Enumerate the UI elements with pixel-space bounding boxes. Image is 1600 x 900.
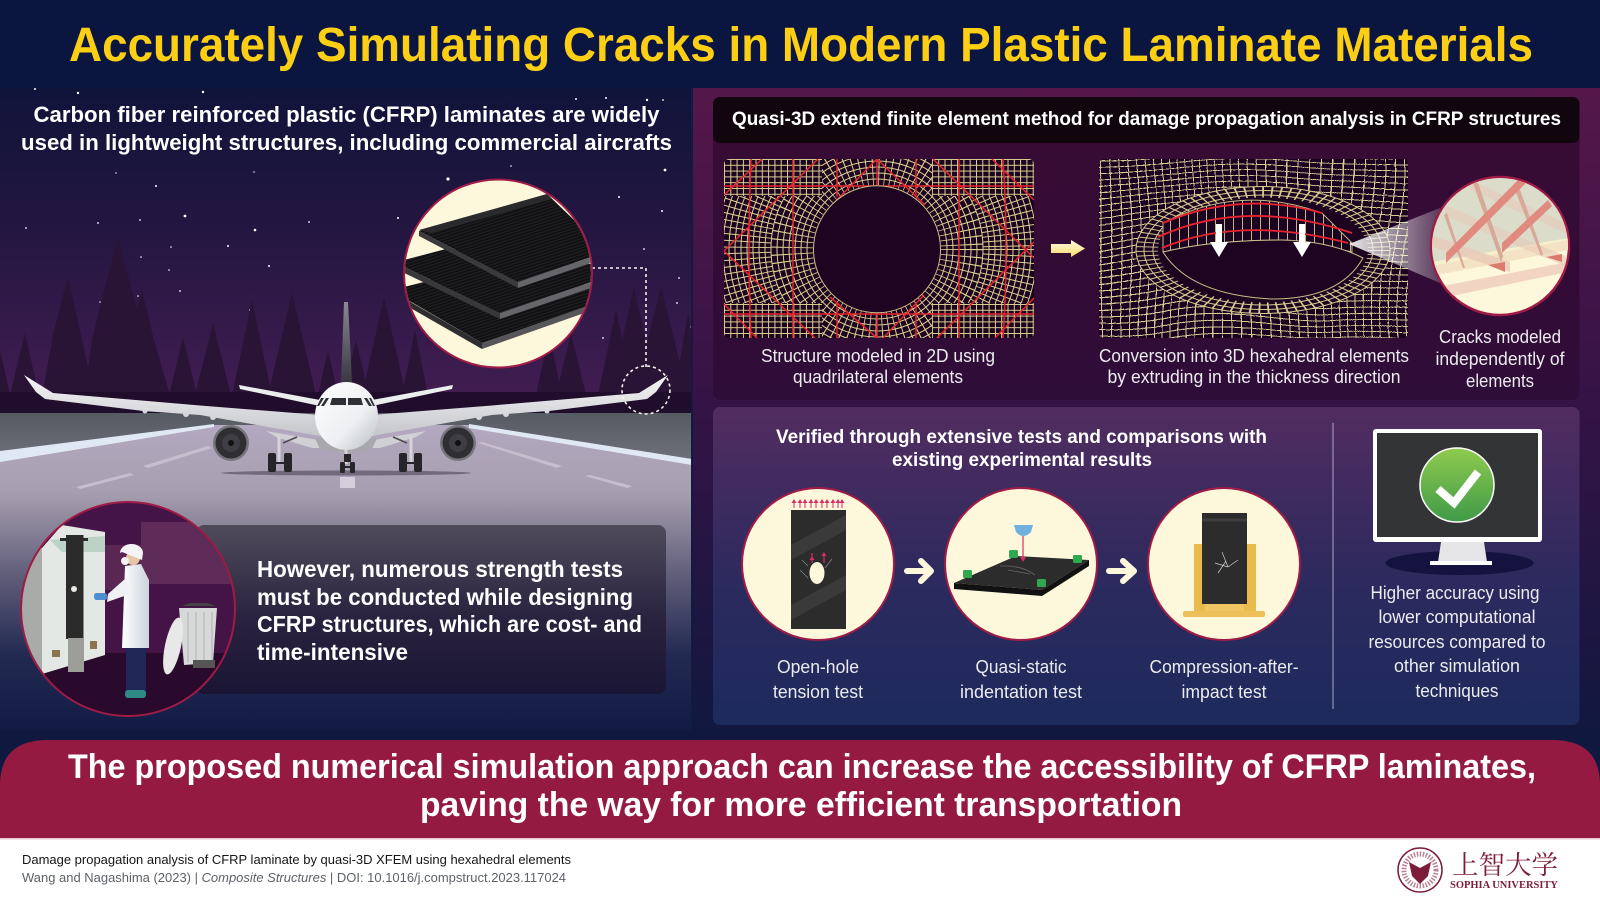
heading: verification: Verified through extensive tests and comparisons with (776, 426, 1267, 448)
citation: Damage propagation analysis of CFRP laminate by quasi-3D XFEM using hexahedral elements (22, 852, 571, 867)
cockpit windows (317, 398, 375, 406)
caption: cracks (1436, 327, 1565, 391)
test machine (22, 548, 42, 671)
icon: open-hole tension test (742, 488, 894, 640)
engine left (213, 425, 249, 461)
top layer (419, 194, 590, 262)
waste bin (159, 603, 217, 676)
label: open-hole: tension test (773, 682, 863, 702)
dashed wingtip callout connector (592, 268, 670, 414)
logo: Sophia University (1398, 845, 1558, 892)
label: quasi-static (960, 657, 1082, 702)
callout: testing cost text panel (196, 525, 666, 694)
callout: testing cost text panel: must be conducted while designing (257, 584, 633, 610)
landing gear (268, 434, 422, 473)
runway shoulders (0, 413, 692, 473)
fuselage (315, 382, 378, 450)
callout: testing cost text panel: However, numerous strength tests (257, 556, 623, 582)
caption: 2D: quadrilateral elements (793, 367, 963, 387)
runway dashes (76, 442, 632, 489)
tail fin (341, 302, 352, 382)
wing fairing (266, 431, 330, 448)
aircraft (24, 302, 668, 476)
runway edge lines (0, 424, 214, 462)
icon: monitor with check mark (1373, 429, 1542, 575)
bottom layer (406, 280, 590, 343)
label: quasi-static: indentation test (960, 682, 1082, 702)
icon: quasi-static indentation test (945, 488, 1097, 640)
icon: carbon laminate magnified circle (400, 180, 600, 368)
label: compression-after-impact: Compression-after- (1150, 657, 1299, 677)
heading: verification: existing experimental results (892, 449, 1152, 471)
crack lines (1158, 204, 1352, 248)
chart: 3D hexahedral mesh (1099, 159, 1408, 338)
red reinforcement lines (724, 159, 1034, 338)
right wing (372, 375, 668, 436)
heading: left intro text: Carbon fiber reinforced plastic (CFRP) laminates are widely (34, 102, 660, 127)
label: compression-after-impact: impact test (1182, 682, 1266, 702)
text: higher accuracy: other simulation (1394, 656, 1520, 676)
panel: method panel (713, 89, 1580, 409)
arrow (1109, 561, 1134, 581)
title banner (0, 0, 1600, 88)
panel: right background (693, 88, 1600, 740)
citation (22, 852, 571, 885)
panel: left scene with aircraft (0, 88, 702, 730)
technician (94, 544, 149, 698)
arrow (907, 561, 931, 581)
lab cabinets (141, 522, 236, 584)
runway surface (0, 425, 692, 730)
hole (1163, 240, 1363, 299)
label: quasi-static: Quasi-static (976, 657, 1066, 677)
logo: Sophia University: SOPHIA UNIVERSITY (1450, 879, 1558, 891)
extruded band (1163, 200, 1352, 252)
conclusion banner: The proposed numerical simulation approach can increase the accessibility of CFRP laminates, (68, 748, 1536, 786)
footer (0, 838, 1600, 900)
label: open-hole: Open-hole (777, 657, 859, 677)
divider between panels (691, 88, 692, 720)
citation: Wang and Nagashima (2023) | Composite Structures | DOI: 10.1016/j.compstruct.2023.117024 (22, 870, 566, 885)
conclusion banner: paving the way for more efficient transportation (420, 786, 1182, 824)
text: higher accuracy: techniques (1416, 681, 1498, 701)
heading bar: Quasi-3D extend finite element method for damage propagation analysis in CFRP structures (732, 108, 1561, 130)
heading: left intro text: used in lightweight structures, including commercial aircrafts (21, 130, 672, 155)
night sky (0, 88, 692, 413)
stars (25, 88, 691, 339)
caption: 3D (1099, 346, 1409, 387)
middle layer (405, 249, 591, 284)
label: open-hole (773, 657, 863, 702)
panel: verification tests (713, 407, 1580, 725)
arrow: 2D to 3D (1051, 240, 1085, 257)
caption: cracks: Cracks modeled (1439, 327, 1561, 347)
wing pylons (142, 408, 550, 420)
magnification cone (1349, 208, 1440, 283)
title banner: Accurately Simulating Cracks in Modern Plastic Laminate Materials (69, 19, 1533, 72)
caption: 2D (761, 346, 995, 387)
left wing (24, 375, 320, 436)
caption: 2D: Structure modeled in 2D using (761, 346, 995, 366)
conclusion banner (0, 740, 1600, 838)
O-grid around the hole (724, 159, 1034, 338)
hole (814, 186, 940, 313)
stabilizers (239, 385, 320, 406)
text: higher accuracy: Higher accuracy using (1370, 583, 1540, 603)
caption: cracks: independently of (1436, 349, 1565, 369)
text: higher accuracy (1368, 583, 1546, 701)
forest silhouette (0, 238, 702, 395)
caption: cracks: elements (1466, 371, 1534, 391)
callout: testing cost text panel: time-intensive (257, 639, 408, 665)
caption: 3D: by extruding in the thickness direction (1108, 367, 1400, 387)
heading: left intro text (21, 102, 672, 155)
icon: compression-after-impact test (1148, 488, 1300, 640)
engine right (440, 425, 476, 461)
icon: laboratory technician circle (20, 502, 240, 723)
icon: independent cracks circle (1430, 170, 1570, 315)
heading: verification (776, 426, 1267, 471)
label: compression-after-impact (1150, 657, 1299, 702)
logo: Sophia University: 上智大学 (1452, 845, 1558, 882)
O-grid around the hole (1136, 186, 1390, 314)
callout: testing cost text panel: CFRP structures, which are cost- and (257, 611, 642, 637)
divider (1332, 423, 1334, 709)
chart: 2D quadrilateral mesh (724, 159, 1034, 338)
caption: 3D: Conversion into 3D hexahedral elements (1099, 346, 1409, 366)
extrusion arrows (1210, 224, 1311, 257)
ground shadow (221, 470, 471, 476)
heading bar (713, 97, 1580, 143)
text: higher accuracy: lower computational (1378, 607, 1536, 627)
text: higher accuracy: resources compared to (1368, 632, 1546, 652)
